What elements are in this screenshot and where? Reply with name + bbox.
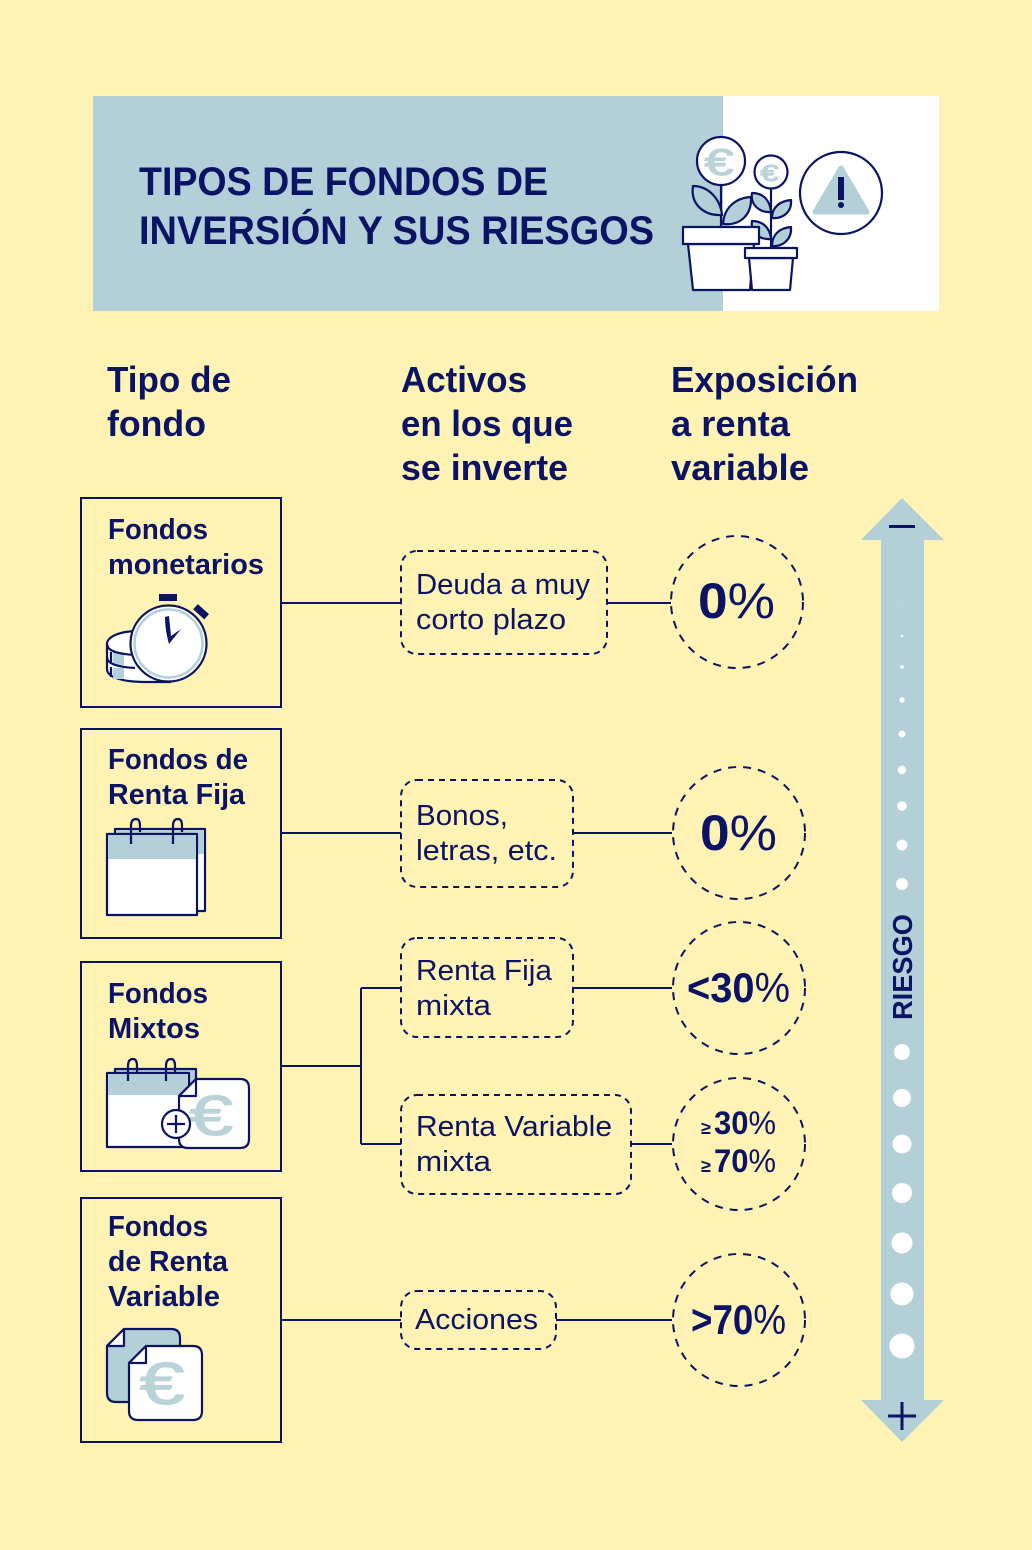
label: fondos monetarios: monetarios [108, 549, 264, 581]
panel: fondos monetarios [81, 498, 281, 707]
column heading: exposición: a renta [671, 403, 791, 444]
header banner [93, 96, 939, 311]
label: fondos monetarios: Fondos [108, 514, 208, 546]
icon: calendar plus euro document: € [189, 1084, 233, 1148]
minus sign [889, 525, 915, 528]
label: fondos de renta fija [108, 744, 248, 811]
title: INVERSIÓN Y SUS RIESGOS [139, 207, 654, 253]
column heading: tipo de fondo [107, 359, 231, 444]
asset: renta variable mixta: Renta Variable [416, 1111, 612, 1143]
icon: warning [800, 152, 882, 234]
asset: renta fija mixta: Renta Fija [416, 955, 553, 987]
asset: deuda a muy corto plazo [401, 551, 607, 654]
exposure: 30% a 70%: ≥ [701, 1156, 711, 1176]
panel: fondos de renta variable [81, 1198, 281, 1442]
asset: deuda a muy corto plazo: corto plazo [416, 604, 566, 636]
icon: plants with euro coins [683, 137, 797, 290]
exposure: 30% a 70%: 70% [714, 1143, 776, 1179]
icon: euro documents [107, 1329, 202, 1420]
icon: stopwatch and coins [107, 594, 209, 682]
asset: renta fija mixta: mixta [416, 990, 492, 1022]
exposure: más de 70%: >70% [691, 1296, 786, 1343]
icon: calendar [107, 819, 205, 915]
exposure: más de 70% [673, 1254, 805, 1386]
exposure: 0% monetarios: 0% [698, 573, 775, 629]
asset: bonos, letras: Bonos, [416, 800, 508, 832]
icon: plants with euro coins: € [704, 142, 734, 183]
panel: fondos de renta fija [81, 729, 281, 938]
connector lines [281, 603, 672, 1320]
asset: renta variable mixta: mixta [416, 1146, 492, 1178]
label: fondos de renta variable [108, 1211, 229, 1313]
column heading: activos: Activos [401, 359, 527, 400]
column heading: tipo de fondo: Tipo de [107, 359, 231, 400]
icon: plants with euro coins: € [760, 160, 779, 186]
asset: renta variable mixta [401, 1095, 631, 1194]
column heading: activos: se inverte [401, 447, 568, 488]
label: fondos de renta fija: Fondos de [108, 744, 248, 776]
asset: acciones [401, 1291, 556, 1349]
label: fondos de renta fija: Renta Fija [108, 779, 246, 811]
exposure: 0% monetarios [671, 536, 803, 668]
exposure: 30% a 70%: ≥ [701, 1118, 711, 1138]
risk dots [890, 604, 914, 1358]
plus sign [888, 1402, 916, 1430]
label: fondos monetarios [108, 514, 264, 581]
risk arrow [861, 498, 944, 1442]
exposure: 30% a 70% [673, 1078, 805, 1210]
exposure: 30% a 70%: 30% [714, 1105, 776, 1141]
title: TIPOS DE FONDOS DE [139, 160, 548, 204]
column heading: exposición: Exposición [671, 359, 858, 400]
risk label: RIESGO [887, 914, 918, 1020]
asset: bonos, letras [401, 780, 573, 887]
icon: euro documents: € [140, 1351, 184, 1417]
column heading: exposición [671, 359, 858, 488]
column heading: exposición: variable [671, 447, 809, 488]
asset: bonos, letras: letras, etc. [416, 835, 557, 867]
label: fondos mixtos: Mixtos [108, 1013, 200, 1045]
exposure: 0% renta fija [673, 767, 805, 899]
column heading: activos: en los que [401, 403, 573, 444]
asset: acciones: Acciones [415, 1304, 538, 1336]
label: fondos de renta variable: Fondos [108, 1211, 208, 1243]
asset: deuda a muy corto plazo: Deuda a muy [416, 569, 590, 601]
column heading: tipo de fondo: fondo [107, 403, 206, 444]
title [139, 160, 654, 253]
column heading: activos [401, 359, 573, 488]
exposure: 0% renta fija: 0% [700, 805, 777, 861]
label: fondos mixtos [108, 978, 208, 1045]
label: fondos de renta variable: de Renta [108, 1246, 229, 1278]
exposure: menos de 30%: <30% [687, 964, 790, 1011]
label: fondos mixtos: Fondos [108, 978, 208, 1010]
label: fondos de renta variable: Variable [108, 1281, 220, 1313]
icon: calendar plus euro document [107, 1059, 249, 1148]
exposure: menos de 30% [673, 922, 805, 1054]
asset: renta fija mixta [401, 938, 573, 1037]
panel: fondos mixtos [81, 962, 281, 1171]
